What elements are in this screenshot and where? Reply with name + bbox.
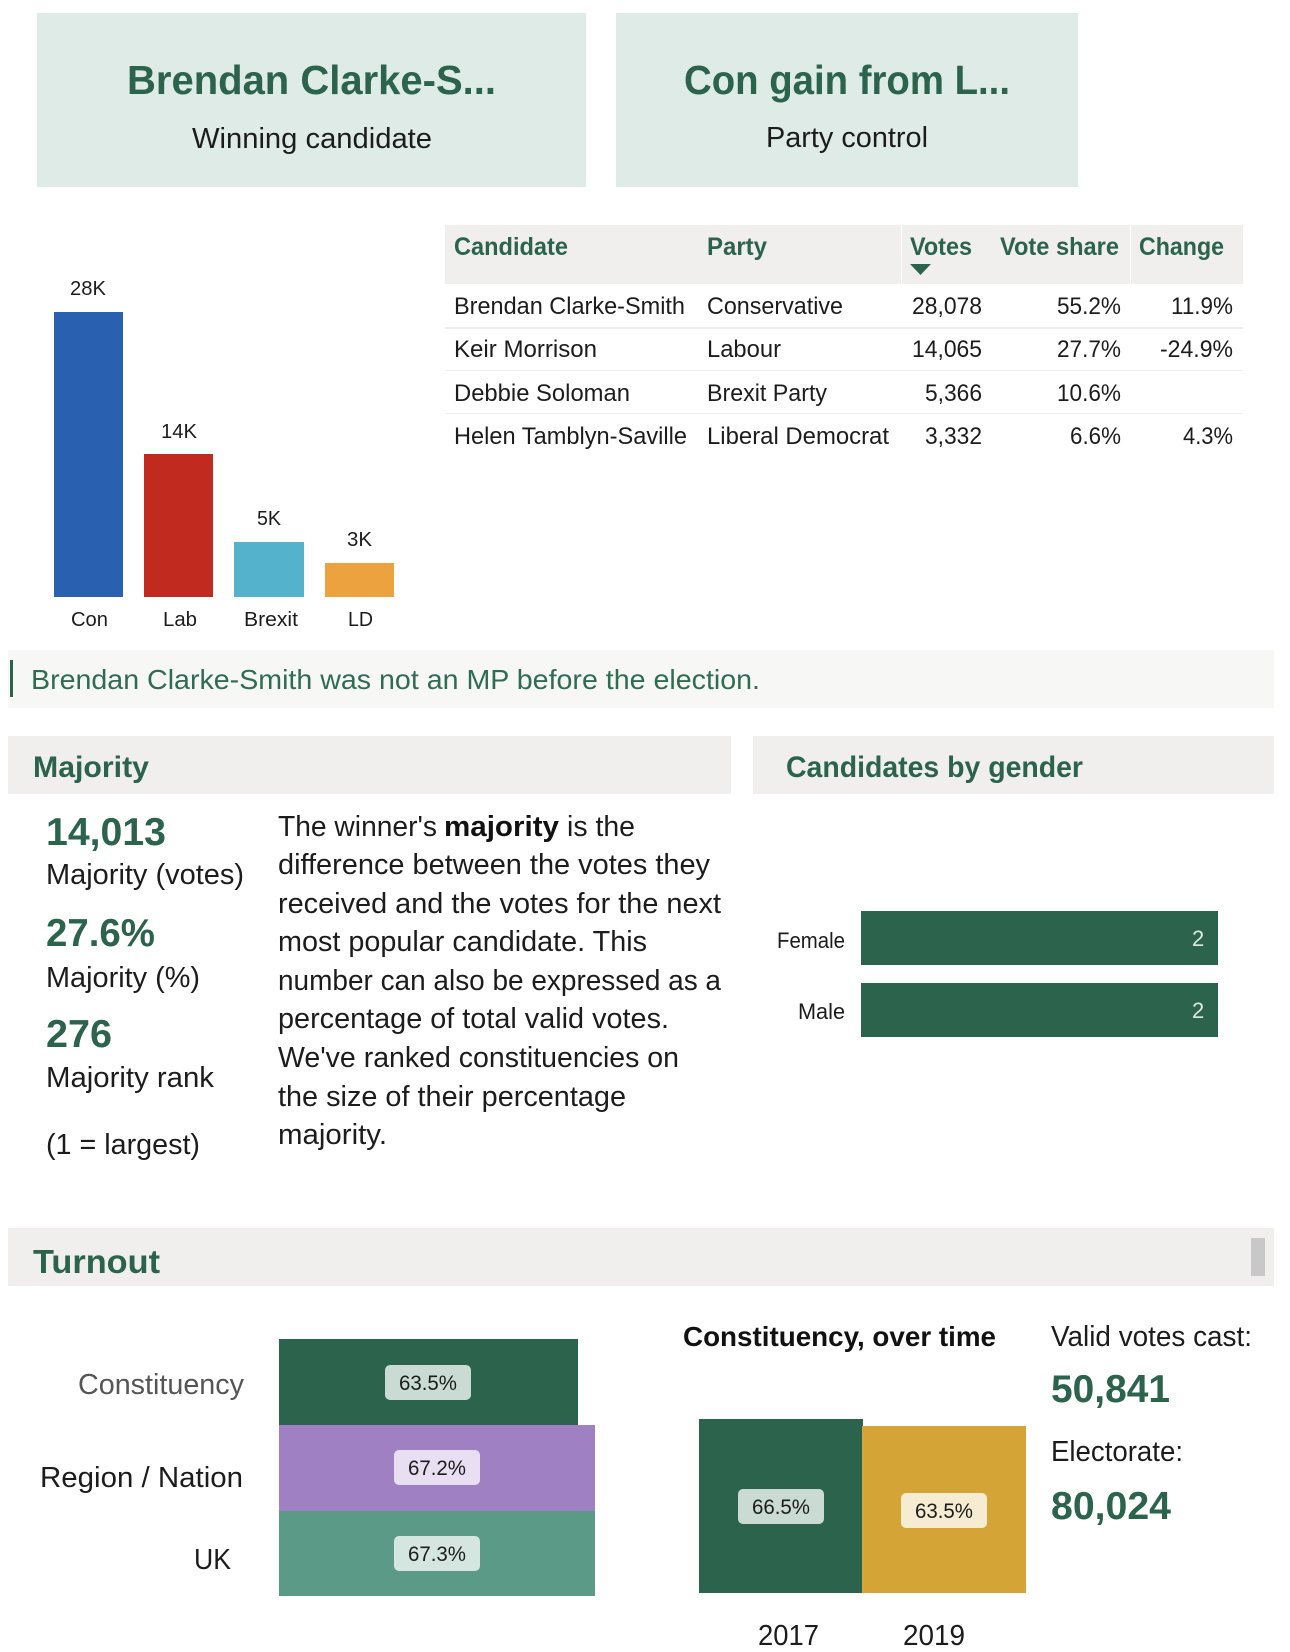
table row: Helen Tamblyn-Saville: Helen Tamblyn-Saville (454, 423, 687, 450)
bar: Constituency (78, 1339, 578, 1425)
bar: Brexit: 5K (257, 508, 282, 530)
stat: majority percent (46, 912, 200, 994)
table row: Keir Morrison: -24.9% (1160, 336, 1233, 363)
stat: valid votes cast: 50,841 (1051, 1368, 1170, 1411)
table row: Debbie Soloman (454, 380, 1121, 407)
majority explanation text: majority. (278, 1119, 387, 1151)
table row: Brendan Clarke-Smith: 11.9% (1171, 293, 1233, 320)
heading: Majority: Majority (33, 751, 149, 784)
table row: Brendan Clarke-Smith: Conservative (707, 293, 843, 320)
heading: Candidates by gender: Candidates by gender (786, 751, 1083, 784)
scrollbar thumb (1251, 1238, 1265, 1276)
bar chart: turnout comparison (40, 1339, 595, 1596)
heading: Turnout: Turnout (33, 1243, 160, 1280)
majority explanation text: The winner's (278, 811, 437, 843)
stat: majority percent: 27.6% (46, 912, 155, 955)
majority figures (46, 811, 244, 1161)
table row: Brendan Clarke-Smith (454, 293, 1233, 320)
bar: UK: 67.3% (408, 1543, 466, 1566)
bar: 2017 (699, 1419, 863, 1652)
stat: electorate: Electorate: (1051, 1436, 1183, 1468)
bar: 2017: 2017 (758, 1620, 819, 1652)
card: winning candidate (37, 13, 586, 187)
majority explanation text: We've ranked constituencies on (278, 1042, 679, 1074)
bar: Female (777, 911, 1218, 965)
table header: Vote share (1000, 233, 1119, 261)
bar: Constituency: 63.5% (399, 1372, 457, 1395)
bar: Region / Nation: Region / Nation (40, 1462, 243, 1494)
bar: LD (325, 529, 394, 631)
party control caption: Party control (766, 122, 928, 154)
table row: Keir Morrison: 14,065 (912, 336, 982, 363)
table row: Keir Morrison: 27.7% (1057, 336, 1121, 363)
table row: Debbie Soloman: 10.6% (1057, 380, 1121, 407)
majority explanation text: the size of their percentage (278, 1081, 626, 1113)
heading: Turnout (8, 1228, 1274, 1286)
table row: Debbie Soloman: 5,366 (925, 380, 982, 407)
stat: majority votes (46, 811, 244, 891)
bar: Male: 2 (1192, 998, 1204, 1023)
results table (445, 225, 1243, 450)
bar: UK (194, 1511, 595, 1596)
card: party control (616, 13, 1078, 187)
table row: Helen Tamblyn-Saville: 6.6% (1070, 423, 1121, 450)
bar: Lab: 14K (161, 421, 198, 443)
bar: Male (798, 983, 1218, 1037)
heading: Constituency, over time: Constituency, over time (683, 1321, 996, 1352)
majority explanation text (278, 811, 722, 1151)
table row: Keir Morrison: Keir Morrison (454, 336, 597, 363)
bar chart: votes by party (54, 278, 394, 631)
heading: Majority (8, 736, 731, 794)
stat: valid votes cast (1051, 1321, 1252, 1411)
heading: Candidates by gender (753, 736, 1274, 794)
bar: Female: Female (777, 928, 845, 953)
majority explanation text: most popular candidate. This (278, 926, 647, 958)
table header: Party (707, 233, 767, 261)
table row: Keir Morrison (454, 336, 1233, 363)
bar: Male: Male (798, 999, 845, 1024)
bar chart: constituency turnout over time (699, 1419, 1026, 1652)
stat: majority votes: 14,013 (46, 811, 166, 854)
table row: Brendan Clarke-Smith: 28,078 (912, 293, 982, 320)
table row: Brendan Clarke-Smith: 55.2% (1057, 293, 1121, 320)
winning candidate caption: Winning candidate (192, 123, 432, 155)
majority explanation text: received and the votes for the next (278, 888, 721, 920)
bar: 2019: 63.5% (915, 1500, 973, 1523)
table row: Helen Tamblyn-Saville: 3,332 (925, 423, 982, 450)
stat: majority rank: Majority rank (46, 1062, 214, 1094)
stat: majority votes: Majority (votes) (46, 859, 244, 891)
note: previous MP status: Brendan Clarke-Smith was not an MP before the election. (31, 664, 760, 695)
bar: Brexit (234, 508, 304, 631)
table row: Helen Tamblyn-Saville: 4.3% (1183, 423, 1233, 450)
bar: LD: 3K (347, 529, 373, 551)
bar: Constituency: Constituency (78, 1369, 244, 1401)
table row: Debbie Soloman: Brexit Party (707, 380, 827, 407)
bar: Con: 28K (70, 278, 107, 300)
bar: Con (54, 278, 123, 631)
bar: Con: Con (71, 609, 108, 631)
stat: majority rank: 276 (46, 1013, 112, 1056)
table row: Helen Tamblyn-Saville: Liberal Democrat (707, 423, 889, 450)
bar: Lab: Lab (163, 609, 197, 631)
bar: 2019 (862, 1426, 1026, 1652)
bar: UK: UK (194, 1544, 232, 1576)
bar: Region / Nation: 67.2% (408, 1457, 466, 1480)
majority explanation text: difference between the votes they (278, 849, 710, 881)
stat: majority percent: Majority (%) (46, 962, 200, 994)
table row: Brendan Clarke-Smith: Brendan Clarke-Smith (454, 293, 685, 320)
majority explanation text: number can also be expressed as a (278, 965, 722, 997)
table row: Helen Tamblyn-Saville (454, 423, 1233, 450)
table header: Candidate (454, 233, 568, 261)
stat: majority rank: (1 = largest) (46, 1129, 200, 1161)
bar: Female: 2 (1192, 926, 1204, 951)
bar: Brexit: Brexit (244, 609, 298, 631)
party control value: Con gain from L... (684, 57, 1010, 103)
bar: 2017: 66.5% (752, 1496, 810, 1519)
majority explanation text: percentage of total valid votes. (278, 1003, 669, 1035)
bar: 2019: 2019 (903, 1620, 965, 1652)
bar chart: candidates by gender (777, 911, 1218, 1037)
table header: Votes (910, 233, 972, 261)
majority explanation text: is the (567, 811, 635, 843)
bar: LD: LD (348, 609, 373, 631)
majority explanation text: majority (444, 811, 559, 843)
table header (445, 225, 1243, 284)
stat: majority rank (46, 1013, 214, 1161)
table header: Change (1139, 233, 1224, 261)
stat: valid votes cast: Valid votes cast: (1051, 1321, 1252, 1353)
table row: Keir Morrison: Labour (707, 336, 781, 363)
table row: Debbie Soloman: Debbie Soloman (454, 380, 630, 407)
bar: Lab (144, 421, 213, 631)
bar: Region / Nation (40, 1425, 595, 1511)
stat: electorate: 80,024 (1051, 1485, 1171, 1528)
note: previous MP status (8, 650, 1274, 708)
winning candidate name: Brendan Clarke-S... (127, 57, 496, 103)
stat: electorate (1051, 1436, 1183, 1528)
